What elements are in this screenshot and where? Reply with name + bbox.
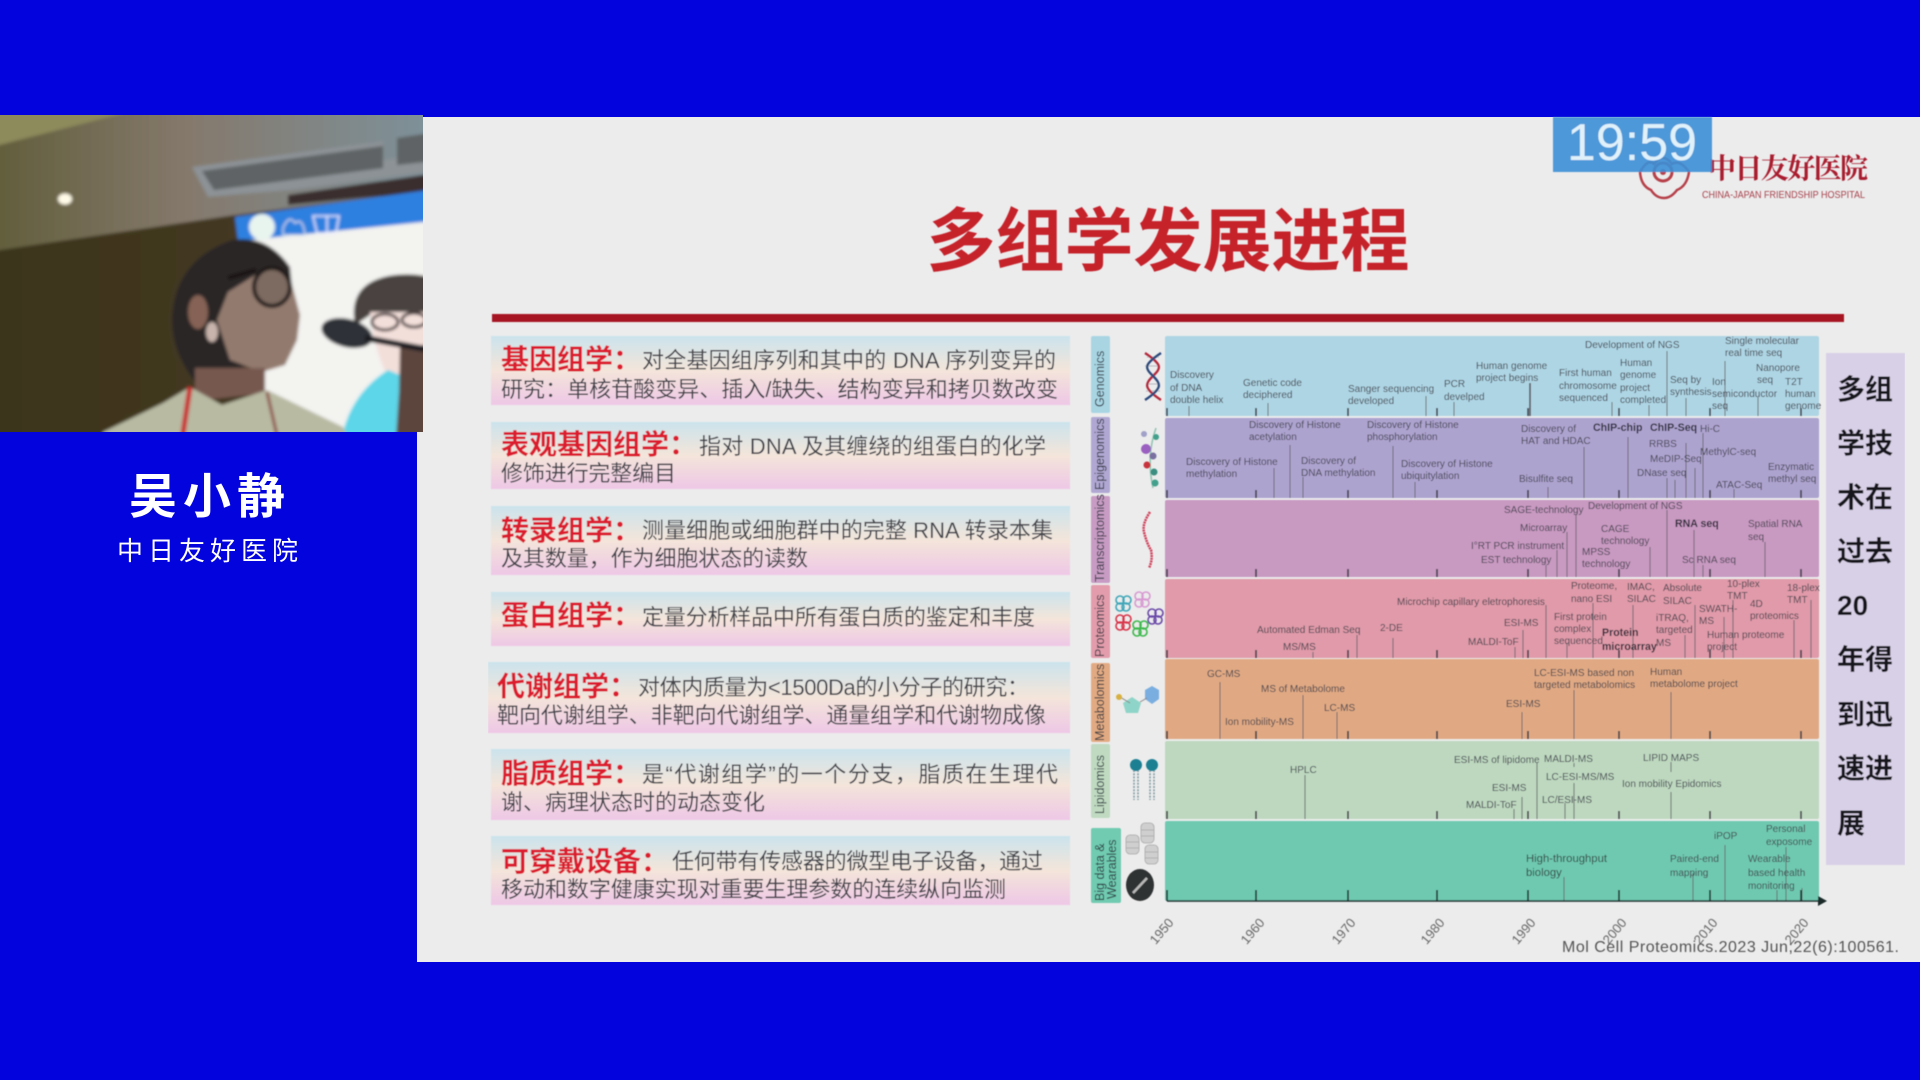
- band: proteomics: targeted: [1656, 625, 1693, 636]
- band: epigenomics: DNase seq: [1637, 468, 1686, 479]
- band: epigenomics: Discovery of: [1521, 424, 1576, 435]
- band: epigenomics: methylation: [1186, 469, 1237, 480]
- band: genomics: PCR: [1444, 379, 1465, 390]
- band: genomics: Seq by: [1670, 375, 1701, 386]
- band: transcriptomics: EST technology: [1481, 555, 1551, 566]
- band: epigenomics: phosphorylation: [1367, 432, 1438, 443]
- side panel: summary: 到迅: [1837, 699, 1893, 730]
- band: genomics: First human: [1559, 368, 1612, 379]
- band: transcriptomics: technology: [1582, 559, 1630, 570]
- band: transcriptomics: Microarray: [1520, 523, 1567, 534]
- band: epigenomics: methyl seq: [1768, 474, 1816, 485]
- band: proteomics: Proteome,: [1571, 581, 1617, 592]
- band: genomics: semiconductor: [1712, 389, 1778, 400]
- band: genomics: chromosome: [1559, 381, 1617, 392]
- icon: lipid bilayer: [1130, 759, 1158, 800]
- band: big data and wearables: [1165, 821, 1819, 901]
- band: genomics: real time seq: [1725, 348, 1782, 359]
- band: big data and wearables: Personal: [1766, 824, 1805, 835]
- band: transcriptomics: RNA seq: [1675, 518, 1719, 530]
- definition row: lipidomics: [491, 749, 1070, 820]
- band: metabolomics: LC-ESI-MS based non: [1534, 668, 1634, 679]
- band: metabolomics: Ion mobility-MS: [1225, 717, 1294, 728]
- icon: protein blobs: [1116, 592, 1163, 636]
- band: epigenomics: RRBS: [1649, 439, 1677, 450]
- band: genomics: genome: [1620, 370, 1657, 381]
- band: epigenomics: ChIP-chip: [1593, 422, 1643, 434]
- band: genomics: of DNA: [1170, 383, 1203, 394]
- band: proteomics: Protein: [1602, 627, 1638, 639]
- definition row: wearables: 移动和数字健康实现对重要生理参数的连续纵向监测: [501, 877, 1006, 902]
- definition row: genomics: 研究：单核苷酸变异、插入/缺失、结构变异和拷贝数改变: [501, 377, 1058, 402]
- icon: metabolite molecules: [1116, 686, 1159, 713]
- band: proteomics: 4D: [1750, 599, 1763, 610]
- band: proteomics: First protein: [1554, 612, 1607, 623]
- band: proteomics: MS: [1699, 616, 1714, 627]
- band: genomics: human: [1785, 389, 1816, 400]
- band: big data and wearables: High-throughput: [1526, 853, 1608, 865]
- band: big data and wearables: biology: [1526, 867, 1562, 879]
- definition row: proteomics: 蛋白组学：: [501, 600, 641, 631]
- band: transcriptomics: technology: [1601, 536, 1649, 547]
- band: epigenomics: Discovery of Histone: [1186, 457, 1278, 468]
- band: transcriptomics: Sc RNA seq: [1682, 555, 1736, 566]
- band: transcriptomics: seq: [1748, 532, 1764, 543]
- definition row: wearables: [491, 836, 1070, 905]
- band: genomics: [1165, 336, 1822, 416]
- band: epigenomics: Discovery of: [1301, 456, 1356, 467]
- band: proteomics: SILAC: [1663, 596, 1692, 607]
- band: genomics: Nanopore: [1756, 363, 1800, 374]
- icon: RNA strand: [1144, 512, 1152, 568]
- band: big data and wearables: Wearable: [1748, 854, 1791, 865]
- band: epigenomics: HAT and HDAC: [1521, 436, 1591, 447]
- side panel: summary: 学技: [1837, 428, 1893, 459]
- band: proteomics: TMT: [1727, 591, 1748, 602]
- band: genomics: Development of NGS: [1585, 340, 1680, 351]
- definition row: epigenomics: 指对 DNA 及其缠绕的组蛋白的化学: [699, 434, 1046, 459]
- timeline axis: [1147, 890, 1827, 947]
- definition row: transcriptomics: 及其数量，作为细胞状态的读数: [501, 546, 808, 571]
- side panel: summary: 多组: [1837, 374, 1893, 405]
- band: lipidomics: LIPID MAPS: [1643, 753, 1699, 764]
- category tags: Transcriptomics: [1093, 494, 1107, 582]
- band: metabolomics: ESI-MS: [1506, 699, 1541, 710]
- band: genomics: develped: [1444, 392, 1485, 403]
- icon: data storage cylinders: [1126, 823, 1158, 864]
- timer: 19:59: [1567, 114, 1697, 172]
- band: epigenomics: Bisulfite seq: [1519, 474, 1573, 485]
- title: 多组学发展进程: [926, 203, 1410, 280]
- timeline axis: 1990: [1509, 915, 1539, 947]
- definition row: metabolomics: 对体内质量为<1500Da的小分子的研究：: [638, 675, 1029, 700]
- band: metabolomics: MS of Metabolome: [1261, 684, 1345, 695]
- band: transcriptomics: I°RT PCR instrument: [1471, 541, 1564, 552]
- side panel: summary: 展: [1837, 808, 1865, 839]
- timeline axis: 2010: [1691, 915, 1721, 947]
- band: epigenomics: Hi-C: [1700, 424, 1720, 435]
- band: big data and wearables: based health: [1748, 868, 1805, 879]
- band: epigenomics: Discovery of Histone: [1401, 459, 1493, 470]
- band: lipidomics: [1165, 741, 1819, 819]
- band: proteomics: MS/MS: [1283, 642, 1316, 653]
- definition row: genomics: 基因组学：: [501, 344, 641, 375]
- band: epigenomics: Discovery of Histone: [1367, 420, 1459, 431]
- band: transcriptomics: [1165, 500, 1819, 577]
- definition row: metabolomics: 靶向代谢组学、非靶向代谢组学、通量组学和代谢物成像: [497, 703, 1046, 728]
- band: metabolomics: metabolome project: [1650, 679, 1738, 690]
- definition row: lipidomics: 是“代谢组学”的一个分支，脂质在生理代: [642, 762, 1058, 787]
- icon: epigenetic marks: [1141, 428, 1159, 488]
- band: metabolomics: [1165, 659, 1819, 739]
- band: big data and wearables: mapping: [1670, 868, 1708, 879]
- definition row: proteomics: 定量分析样品中所有蛋白质的鉴定和丰度: [642, 605, 1035, 630]
- definition row: epigenomics: 表观基因组学：: [501, 429, 697, 460]
- band: epigenomics: DNA methylation: [1301, 468, 1375, 479]
- band: genomics: seq: [1757, 375, 1773, 386]
- band: lipidomics: ESI-MS of lipidome: [1454, 755, 1540, 766]
- band: proteomics: 18-plex: [1787, 583, 1820, 594]
- category tags: Proteomics: [1093, 594, 1107, 657]
- band: proteomics: iTRAQ,: [1656, 613, 1689, 624]
- category tags: Wearables: [1105, 839, 1119, 899]
- band: big data and wearables: exposome: [1766, 837, 1813, 848]
- band: genomics: deciphered: [1243, 390, 1292, 401]
- side panel: summary: 年得: [1837, 644, 1893, 675]
- band: genomics: Human genome: [1476, 361, 1548, 372]
- band: lipidomics: Ion mobility Epidomics: [1622, 779, 1721, 790]
- definition row: transcriptomics: 转录组学：: [501, 515, 641, 546]
- citation: Mol Cell Proteomics.2023 Jun;22(6):100561.: [1562, 939, 1899, 956]
- band: proteomics: SWATH-: [1699, 604, 1737, 615]
- band: proteomics: MALDI-ToF: [1468, 637, 1519, 648]
- band: metabolomics: Human: [1650, 667, 1682, 678]
- band: lipidomics: LC-ESI-MS/MS: [1546, 772, 1615, 783]
- band: proteomics: nano ESI: [1571, 594, 1612, 605]
- band: metabolomics: GC-MS: [1207, 669, 1241, 680]
- definition row: metabolomics: 代谢组学：: [497, 671, 637, 702]
- speaker affiliation: 中日友好医院: [117, 536, 303, 566]
- band: proteomics: TMT: [1787, 595, 1808, 606]
- band: genomics: project begins: [1476, 373, 1538, 384]
- band: epigenomics: MethylC-seq: [1700, 447, 1756, 458]
- icon: DNA helix: [1145, 353, 1161, 400]
- category tags: Lipidomics: [1093, 755, 1107, 814]
- band: big data and wearables: monitoring: [1748, 881, 1795, 892]
- band: proteomics: Automated Edman Seq: [1257, 625, 1360, 636]
- definition row: wearables: 可穿戴设备：: [501, 846, 669, 877]
- category tags: Big data &: [1093, 843, 1107, 901]
- band: lipidomics: LC/ESI-MS: [1542, 795, 1592, 806]
- category tags: Metabolomics: [1093, 664, 1107, 741]
- category tags: Genomics: [1093, 351, 1107, 407]
- band: proteomics: microarray: [1602, 641, 1657, 653]
- band: epigenomics: acetylation: [1249, 432, 1297, 443]
- band: proteomics: SILAC: [1627, 594, 1656, 605]
- definition row: genomics: 对全基因组序列和其中的 DNA 序列变异的: [642, 348, 1056, 373]
- band: transcriptomics: Development of NGS: [1588, 501, 1683, 512]
- definition row: epigenomics: [491, 422, 1070, 489]
- band: big data and wearables: iPOP: [1714, 831, 1738, 842]
- side panel: summary: 过去: [1837, 536, 1893, 567]
- band: lipidomics: ESI-MS: [1492, 783, 1527, 794]
- definition row: lipidomics: 谢、病理状态时的动态变化: [501, 790, 765, 815]
- timeline axis: 2020: [1782, 915, 1812, 947]
- band: genomics: project: [1620, 383, 1650, 394]
- timeline axis: 1950: [1147, 915, 1177, 947]
- band: lipidomics: MALDI-ToF: [1466, 800, 1517, 811]
- band: transcriptomics: CAGE: [1601, 524, 1630, 535]
- hospital logo: CHINA-JAPAN FRIENDSHIP HOSPITAL: [1702, 189, 1865, 201]
- band: proteomics: 10-plex: [1727, 579, 1760, 590]
- band: proteomics: Absolute: [1663, 583, 1702, 594]
- band: proteomics: [1165, 579, 1820, 658]
- band: genomics: genome: [1785, 401, 1822, 412]
- timeline axis: 1970: [1329, 915, 1359, 947]
- band: genomics: completed: [1620, 395, 1666, 406]
- timeline axis: 2000: [1600, 915, 1630, 947]
- definition row: transcriptomics: [491, 506, 1070, 575]
- band: proteomics: MS: [1656, 638, 1671, 649]
- side panel: summary: [1826, 353, 1905, 865]
- band: lipidomics: HPLC: [1290, 765, 1317, 776]
- band: genomics: Genetic code: [1243, 378, 1302, 389]
- band: genomics: double helix: [1170, 395, 1223, 406]
- band: metabolomics: LC-MS: [1324, 703, 1355, 714]
- band: proteomics: Human proteome: [1707, 630, 1785, 641]
- icon: wearable band: [1126, 869, 1154, 901]
- band: proteomics: 2-DE: [1380, 623, 1403, 634]
- band: genomics: Sanger sequencing: [1348, 384, 1434, 395]
- speaker name: [117, 471, 303, 566]
- definition row: wearables: 任何带有传感器的微型电子设备，通过: [672, 849, 1043, 874]
- title rule: [492, 314, 1844, 322]
- definition row: proteomics: [491, 592, 1070, 646]
- band: transcriptomics: SAGE-technology: [1504, 505, 1584, 516]
- band: proteomics: IMAC,: [1627, 582, 1655, 593]
- band: genomics: developed: [1348, 396, 1394, 407]
- band: genomics: Single molecular: [1725, 336, 1800, 347]
- band: epigenomics: Enzymatic: [1768, 462, 1814, 473]
- band: epigenomics: ATAC-Seq: [1716, 480, 1762, 491]
- slide background: [417, 117, 1920, 962]
- band: genomics: Ion: [1712, 377, 1726, 388]
- band: proteomics: Microchip capillary eletrophoresis: [1397, 597, 1545, 608]
- timeline axis: 1960: [1238, 915, 1268, 947]
- band: proteomics: complex: [1554, 624, 1591, 635]
- band: lipidomics: MALDI-MS: [1544, 754, 1593, 765]
- side panel: summary: 术在: [1837, 482, 1893, 513]
- band: proteomics: proteomics: [1750, 611, 1799, 622]
- band: epigenomics: MeDIP-Seq: [1650, 454, 1702, 465]
- band: epigenomics: ubiquitylation: [1401, 471, 1459, 482]
- side panel: summary: 20: [1837, 590, 1868, 621]
- band: genomics: synthesis: [1670, 387, 1712, 398]
- speaker video: [0, 115, 423, 432]
- band: genomics: T2T: [1785, 377, 1803, 388]
- band: big data and wearables: Paired-end: [1670, 854, 1719, 865]
- band: genomics: sequenced: [1559, 393, 1608, 404]
- definition row: transcriptomics: 测量细胞或细胞群中的完整 RNA 转录本集: [642, 518, 1053, 543]
- band: metabolomics: targeted metabolomics: [1534, 680, 1635, 691]
- definition row: metabolomics: [488, 662, 1070, 733]
- timeline axis: 1980: [1418, 915, 1448, 947]
- band: genomics: seq: [1712, 401, 1728, 412]
- hospital logo: [1640, 147, 1868, 201]
- definition row: epigenomics: 修饰进行完整编目: [501, 461, 676, 486]
- definition row: genomics: [491, 336, 1070, 405]
- definition row: lipidomics: 脂质组学：: [501, 758, 641, 789]
- band: epigenomics: ChIP-Seq: [1650, 422, 1697, 434]
- band: genomics: Discovery: [1170, 370, 1214, 381]
- hospital logo: 中日友好医院: [1708, 147, 1868, 187]
- side panel: summary: 速进: [1837, 753, 1893, 784]
- category tags: [1091, 336, 1121, 903]
- band: epigenomics: [1165, 418, 1819, 498]
- band: proteomics: sequenced: [1554, 636, 1603, 647]
- band: proteomics: project: [1707, 642, 1737, 653]
- category tags: Epigenomics: [1093, 418, 1107, 490]
- band: epigenomics: Discovery of Histone: [1249, 420, 1341, 431]
- band: transcriptomics: MPSS: [1582, 547, 1611, 558]
- band: transcriptomics: Spatial RNA: [1748, 519, 1803, 530]
- band: proteomics: ESI-MS: [1504, 618, 1539, 629]
- speaker name: 吴小静: [129, 471, 291, 524]
- band: genomics: Human: [1620, 358, 1652, 369]
